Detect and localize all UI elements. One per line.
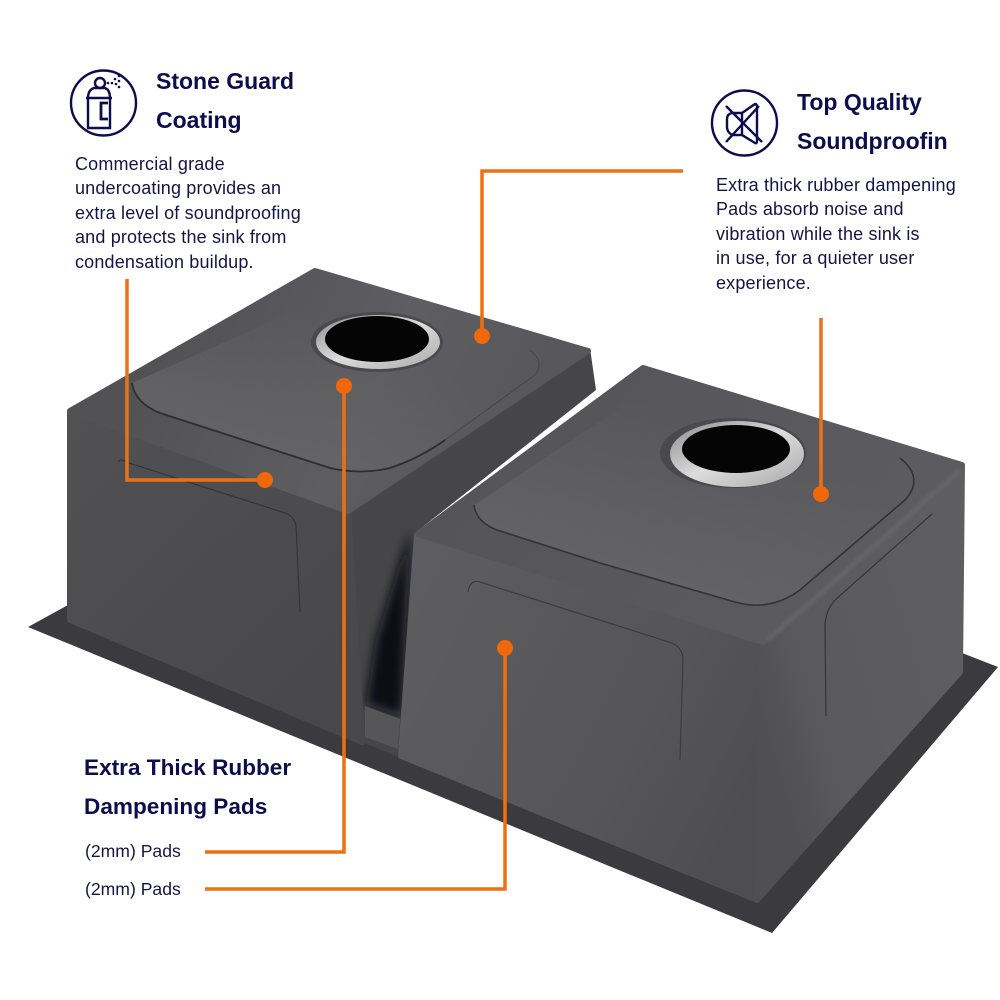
text: soundproofing description: in use, for a quieter user [716,248,915,268]
text: soundproofing description: Pads absorb noise and [716,199,904,219]
icon: muted speaker [710,89,778,157]
heading: stone guard coating: Stone Guard [156,68,294,94]
heading: top quality soundproofing: Top Quality [797,89,922,115]
text: stone guard description: and protects the sink from [75,227,287,247]
text: soundproofing description [716,175,956,293]
text: stone guard description: undercoating provides an [75,178,281,198]
text: soundproofing description: vibration while the sink is [716,224,920,244]
right basin [401,368,962,900]
heading: rubber dampening pads [84,755,291,818]
label: second pads: (2mm) Pads [85,879,181,899]
label: first pads: (2mm) Pads [85,841,181,861]
icon: spray can [70,69,138,137]
text: stone guard description: extra level of soundproofing [75,203,301,223]
text: stone guard description: condensation buildup. [75,252,254,272]
text: soundproofing description: experience. [716,273,811,293]
connector tab [365,706,400,749]
text: soundproofing description: Extra thick rubber dampening [716,175,956,195]
flange [28,605,998,933]
text: stone guard description [75,154,301,272]
heading: top quality soundproofing [797,89,948,154]
heading: stone guard coating: Coating [156,106,242,132]
heading: top quality soundproofing: Soundproofin [797,128,948,154]
heading: stone guard coating [156,68,294,133]
heading: rubber dampening pads: Extra Thick Rubber [84,755,291,780]
heading: rubber dampening pads: Dampening Pads [84,794,267,818]
left basin [70,271,596,757]
text: stone guard description: Commercial grade [75,154,225,174]
